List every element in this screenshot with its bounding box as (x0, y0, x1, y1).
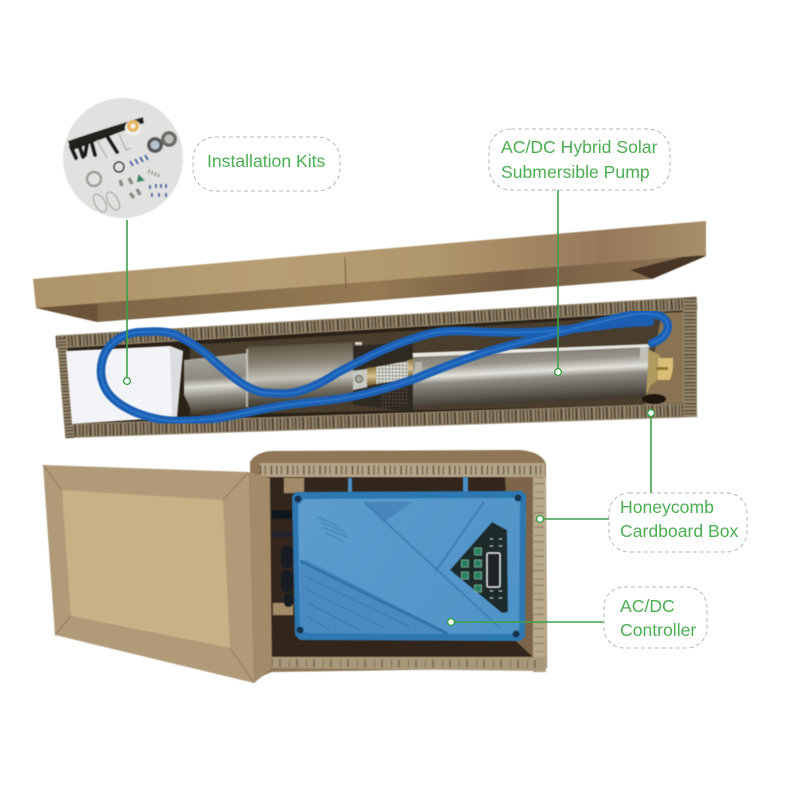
blue pump cables (101, 314, 668, 421)
blue AC/DC controller (292, 477, 526, 641)
label: honeycomb cardboard box: Honeycomb (620, 497, 714, 517)
label: honeycomb cardboard box (609, 493, 747, 552)
submersible pump (184, 342, 673, 412)
label: AC/DC controller: Controller (620, 620, 696, 640)
white installation kit box (66, 346, 183, 424)
label: AC/DC controller: AC/DC (620, 596, 675, 616)
box interior (60, 302, 692, 432)
box shell (250, 450, 547, 680)
controller box (250, 450, 547, 680)
label: installation kits: Installation Kits (207, 151, 326, 171)
side connectors (272, 510, 292, 519)
leader line: controller (448, 619, 604, 625)
leader line: honeycomb box (537, 410, 654, 522)
installation kits photo circle (63, 98, 183, 218)
label: AC/DC controller (604, 587, 707, 648)
cardboard lid (33, 221, 706, 322)
control panel (450, 522, 508, 613)
label: AC/DC hybrid solar submersible pump (489, 129, 670, 190)
honeycomb pump box (56, 298, 697, 438)
label: AC/DC hybrid solar submersible pump: Submersible Pump (501, 162, 650, 182)
leader line: pump (555, 190, 561, 375)
leader line: installation kits (124, 220, 130, 384)
honeycomb walls (56, 298, 697, 438)
label: honeycomb cardboard box: Cardboard Box (620, 521, 739, 541)
label: AC/DC hybrid solar submersible pump: AC/DC Hybrid Solar (501, 137, 658, 157)
label: installation kits (193, 137, 340, 191)
box flap (43, 465, 272, 683)
